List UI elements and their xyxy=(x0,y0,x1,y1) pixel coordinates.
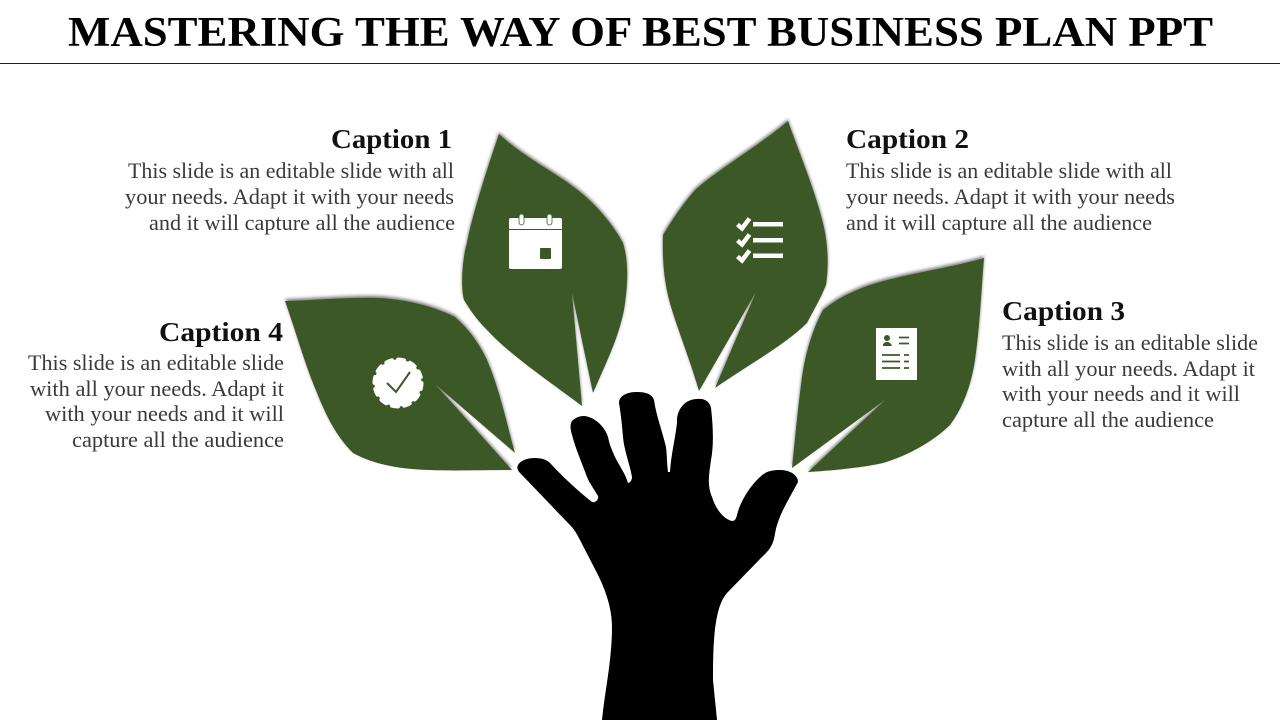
caption 3: with all your needs. Adapt it xyxy=(1002,356,1255,381)
caption 1: This slide is an editable slide with all xyxy=(128,158,454,183)
icon: calendar xyxy=(509,214,562,269)
caption 1: Caption 1 xyxy=(331,124,452,154)
caption 3: capture all the audience xyxy=(1002,407,1214,432)
caption 3: with your needs and it will xyxy=(1002,381,1240,406)
caption 3: This slide is an editable slide xyxy=(1002,330,1258,355)
caption 2: This slide is an editable slide with all xyxy=(846,158,1172,183)
caption 1: and it will capture all the audience xyxy=(149,210,455,235)
icon: check badge xyxy=(374,360,422,406)
leaf 3 with profile document icon xyxy=(792,258,984,472)
caption 4: with your needs and it will xyxy=(45,401,284,426)
caption 1: your needs. Adapt it with your needs xyxy=(125,184,454,209)
icon: profile document xyxy=(876,328,917,380)
caption 2: and it will capture all the audience xyxy=(846,210,1152,235)
title: MASTERING THE WAY OF BEST BUSINESS PLAN PPT xyxy=(68,10,1213,56)
caption 4: This slide is an editable slide xyxy=(28,350,284,375)
caption 3: Caption 3 xyxy=(1002,296,1125,326)
leaf 1 with calendar icon xyxy=(462,134,627,406)
caption 4 xyxy=(28,317,284,452)
hand silhouette xyxy=(517,392,798,720)
caption 4: capture all the audience xyxy=(72,427,284,452)
leaf 2 with checklist icon xyxy=(663,121,828,391)
caption 1 xyxy=(125,124,455,235)
caption 4: with all your needs. Adapt it xyxy=(30,376,284,401)
caption 2: your needs. Adapt it with your needs xyxy=(846,184,1175,209)
leaf 4 with badge icon xyxy=(285,298,515,470)
caption 2 xyxy=(846,124,1175,235)
caption 2: Caption 2 xyxy=(846,124,969,154)
caption 3 xyxy=(1002,296,1258,432)
caption 4: Caption 4 xyxy=(159,317,283,347)
icon: checklist xyxy=(738,218,783,260)
